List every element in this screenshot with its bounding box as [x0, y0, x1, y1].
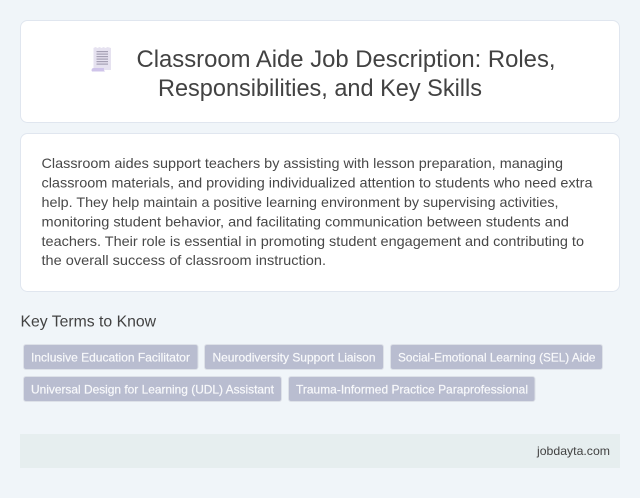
footer [20, 434, 620, 468]
icon: document scroll [92, 47, 111, 72]
heading: key terms: Key Terms to Know [20, 314, 156, 330]
tag: inclusive education [24, 344, 198, 370]
tag: inclusive education: Inclusive Education Facilitator [31, 350, 190, 364]
title [136, 46, 556, 102]
tag: universal design [24, 376, 282, 402]
panel: title card [20, 20, 620, 122]
description text: classroom materials, and providing individualized attention to students who need extra [42, 174, 593, 190]
title: Classroom Aide Job Description: Roles, [136, 46, 556, 73]
description text [42, 155, 593, 268]
tag: trauma-informed [288, 376, 535, 402]
description text: teachers. Their role is essential in promoting student engagement and contributing to [42, 233, 584, 249]
tag: neurodiversity: Neurodiversity Support Liaison [212, 350, 376, 364]
tag: neurodiversity [204, 344, 384, 370]
description text: Classroom aides support teachers by assisting with lesson preparation, managing [42, 155, 563, 171]
tag: universal design: Universal Design for Learning (UDL) Assistant [31, 382, 275, 396]
tag: social-emotional learning: Social-Emotional Learning (SEL) Aide [398, 350, 596, 364]
description text: the overall success of classroom instruction. [42, 252, 326, 268]
tag: social-emotional learning [390, 344, 602, 370]
description text: help. They help maintain a positive learning environment by supervising activities, [42, 194, 558, 210]
description text: monitoring student behavior, and facilitating communication between students and [42, 214, 569, 230]
footer: jobdayta.com [536, 444, 610, 458]
title: Responsibilities, and Key Skills [158, 75, 482, 102]
panel: description card [20, 134, 620, 292]
tag: trauma-informed: Trauma-Informed Practice Paraprofessional [296, 382, 528, 396]
tags: key terms [24, 344, 602, 402]
